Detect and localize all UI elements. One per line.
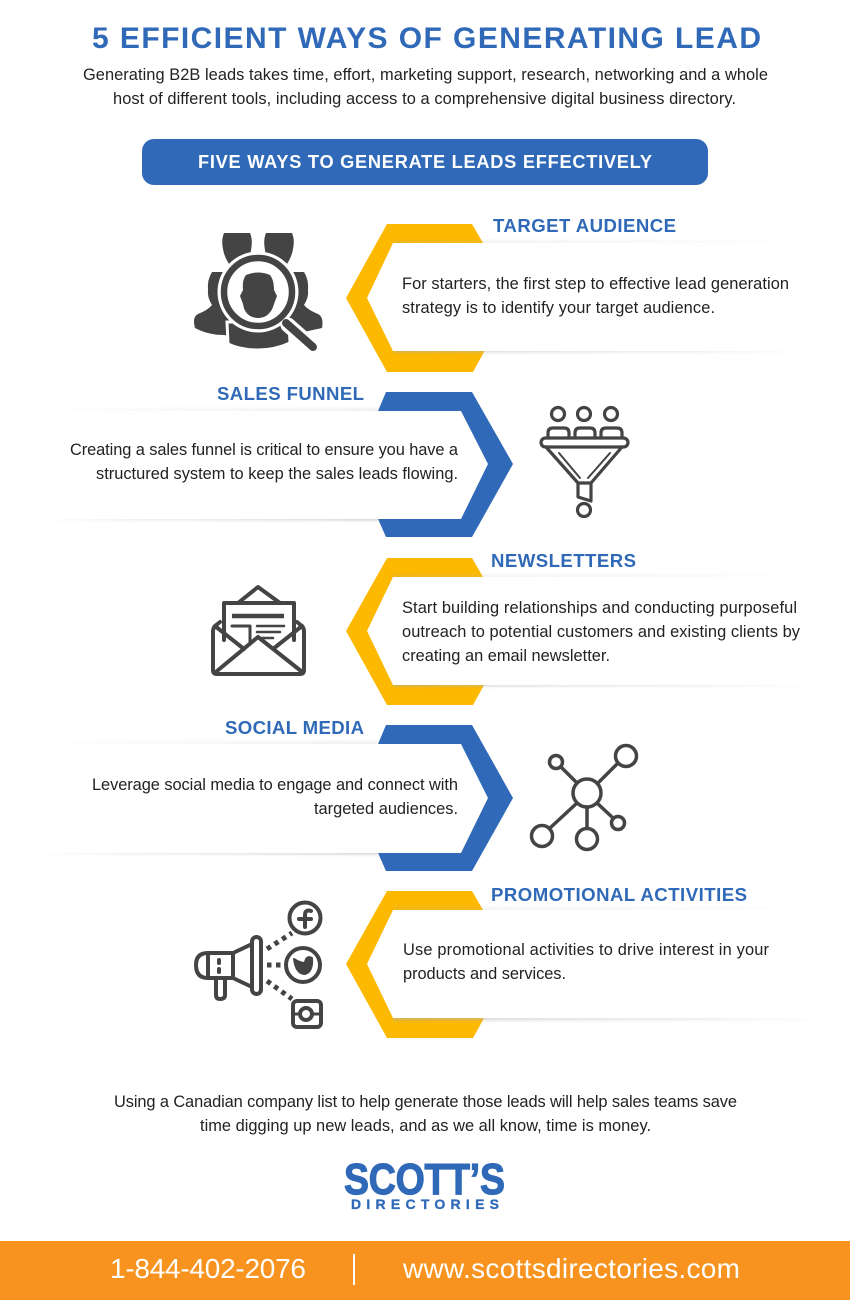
closing text: Using a Canadian company list to help generate those leads will help sales teams save [114, 1093, 737, 1111]
body text: outreach to potential customers and existing clients by [402, 623, 801, 641]
body text: Use promotional activities to drive interest in your [403, 941, 770, 959]
heading: PROMOTIONAL ACTIVITIES [491, 884, 747, 905]
section banner: FIVE WAYS TO GENERATE LEADS EFFECTIVELY [198, 152, 652, 172]
body text: structured system to keep the sales leads flowing. [96, 465, 458, 483]
body text: For starters, the first step to effective lead generation [402, 275, 789, 293]
panel: newsletters [213, 550, 850, 705]
hexagon: blue [378, 392, 513, 537]
closing text [114, 1093, 737, 1135]
body text: targeted audiences. [314, 800, 458, 818]
icon: envelope [213, 587, 304, 674]
logo: Scott's Directories: SCOTT’S [344, 1154, 505, 1204]
icon: megaphone with social icons [196, 902, 321, 1027]
hexagon: yellow [346, 558, 494, 705]
heading: NEWSLETTERS [491, 550, 636, 571]
body text [92, 776, 458, 818]
body text: creating an email newsletter. [402, 647, 610, 665]
body text [402, 599, 801, 665]
icon: audience magnifier [194, 233, 322, 350]
heading: TARGET AUDIENCE [493, 215, 676, 236]
panel: sales funnel [0, 383, 628, 537]
section banner [142, 139, 708, 185]
body text [402, 275, 789, 317]
body text [403, 941, 770, 983]
logo: Scott's Directories: DIRECTORIES [351, 1196, 499, 1212]
intro text: Generating B2B leads takes time, effort, marketing support, research, networking and a whole [83, 66, 768, 84]
panel: social media [0, 717, 636, 871]
icon: network [532, 746, 636, 850]
icon: funnel [541, 408, 628, 516]
body text: Leverage social media to engage and connect with [92, 776, 458, 794]
hexagon: yellow [346, 224, 494, 372]
phone number: 1-844-402-2076 [110, 1253, 306, 1284]
footer bar [0, 1241, 850, 1300]
panel: promotional activities [196, 884, 850, 1038]
body text: strategy is to identify your target audience. [402, 299, 715, 317]
title: 5 EFFICIENT WAYS OF GENERATING LEAD [92, 22, 761, 55]
body text: products and services. [403, 965, 566, 983]
body text: Start building relationships and conducting purposeful [402, 599, 797, 617]
heading: SOCIAL MEDIA [225, 717, 364, 738]
intro text: host of different tools, including access to a comprehensive digital business directory. [113, 90, 736, 108]
closing text: time digging up new leads, and as we all know, time is money. [200, 1117, 651, 1135]
intro text [83, 66, 768, 108]
hexagon: yellow [346, 891, 494, 1038]
body text: Creating a sales funnel is critical to ensure you have a [70, 441, 459, 459]
heading: SALES FUNNEL [217, 383, 364, 404]
panel: target audience [194, 215, 850, 372]
body text [70, 441, 459, 483]
website: www.scottsdirectories.com [402, 1253, 740, 1284]
hexagon: blue [378, 725, 513, 871]
